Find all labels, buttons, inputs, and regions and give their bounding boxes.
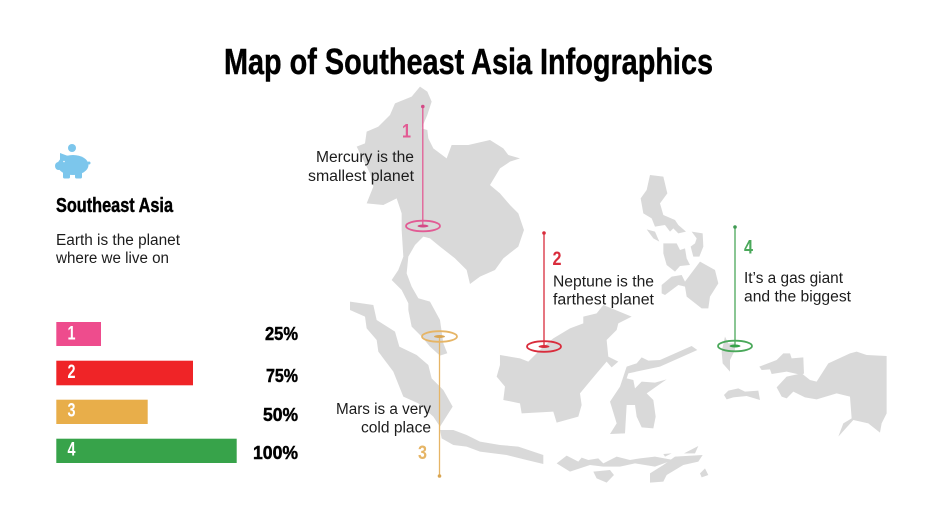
callout 4 bbox=[744, 238, 852, 306]
bar 3 50%: 50% bbox=[263, 405, 298, 425]
bar chart bbox=[56, 322, 298, 463]
callout 1: 1 bbox=[402, 121, 411, 142]
bar 4 100%: 4 bbox=[68, 440, 76, 461]
callout 3: 3 bbox=[418, 443, 427, 464]
bar 4 100% bbox=[56, 439, 298, 463]
title: Map of Southeast Asia Infographics bbox=[224, 41, 713, 82]
callout 2 bbox=[552, 249, 655, 308]
bar 2 75%: 75% bbox=[266, 366, 298, 386]
callout 1: smallest planet bbox=[308, 168, 415, 185]
callout 3 bbox=[336, 401, 431, 464]
marker 2 bbox=[527, 231, 561, 352]
callout 4: and the biggest bbox=[744, 288, 852, 306]
map of Southeast Asia bbox=[350, 87, 887, 483]
left heading: Southeast Asia bbox=[56, 195, 174, 217]
map: Sulawesi, Maluku, Timor and Papua bbox=[610, 337, 887, 483]
callout 4: 4 bbox=[744, 238, 753, 258]
left description: where we live on bbox=[55, 250, 169, 267]
callout 3: Mars is a very bbox=[336, 401, 431, 418]
callout 4: It’s a gas giant bbox=[744, 270, 844, 287]
left description bbox=[55, 232, 181, 267]
marker 4 bbox=[718, 225, 752, 351]
callout 1: Mercury is the bbox=[316, 149, 414, 166]
bar 1 25% bbox=[56, 322, 298, 346]
bar 4 100%: 100% bbox=[253, 443, 298, 463]
map: Philippines bbox=[641, 175, 718, 308]
bar 1 25%: 25% bbox=[265, 324, 298, 344]
map: Sumatra, Java, Sunda islands and Borneo bbox=[350, 302, 673, 483]
map: mainland and peninsula bbox=[357, 87, 524, 356]
bar 2 75%: 2 bbox=[68, 362, 76, 383]
bar 3 50%: 3 bbox=[68, 400, 76, 422]
bar 1 25%: 1 bbox=[68, 323, 76, 344]
bar 3 50% bbox=[56, 400, 298, 425]
callout 2: farthest planet bbox=[553, 292, 655, 308]
callout 3: cold place bbox=[361, 420, 431, 436]
callout 1 bbox=[308, 121, 415, 185]
piggy bank icon bbox=[55, 144, 90, 178]
marker 3 bbox=[422, 331, 457, 478]
marker 1 bbox=[406, 105, 440, 231]
callout 2: Neptune is the bbox=[553, 274, 654, 290]
bar 2 75% bbox=[56, 361, 298, 386]
left description: Earth is the planet bbox=[56, 232, 181, 249]
callout 2: 2 bbox=[552, 249, 562, 270]
